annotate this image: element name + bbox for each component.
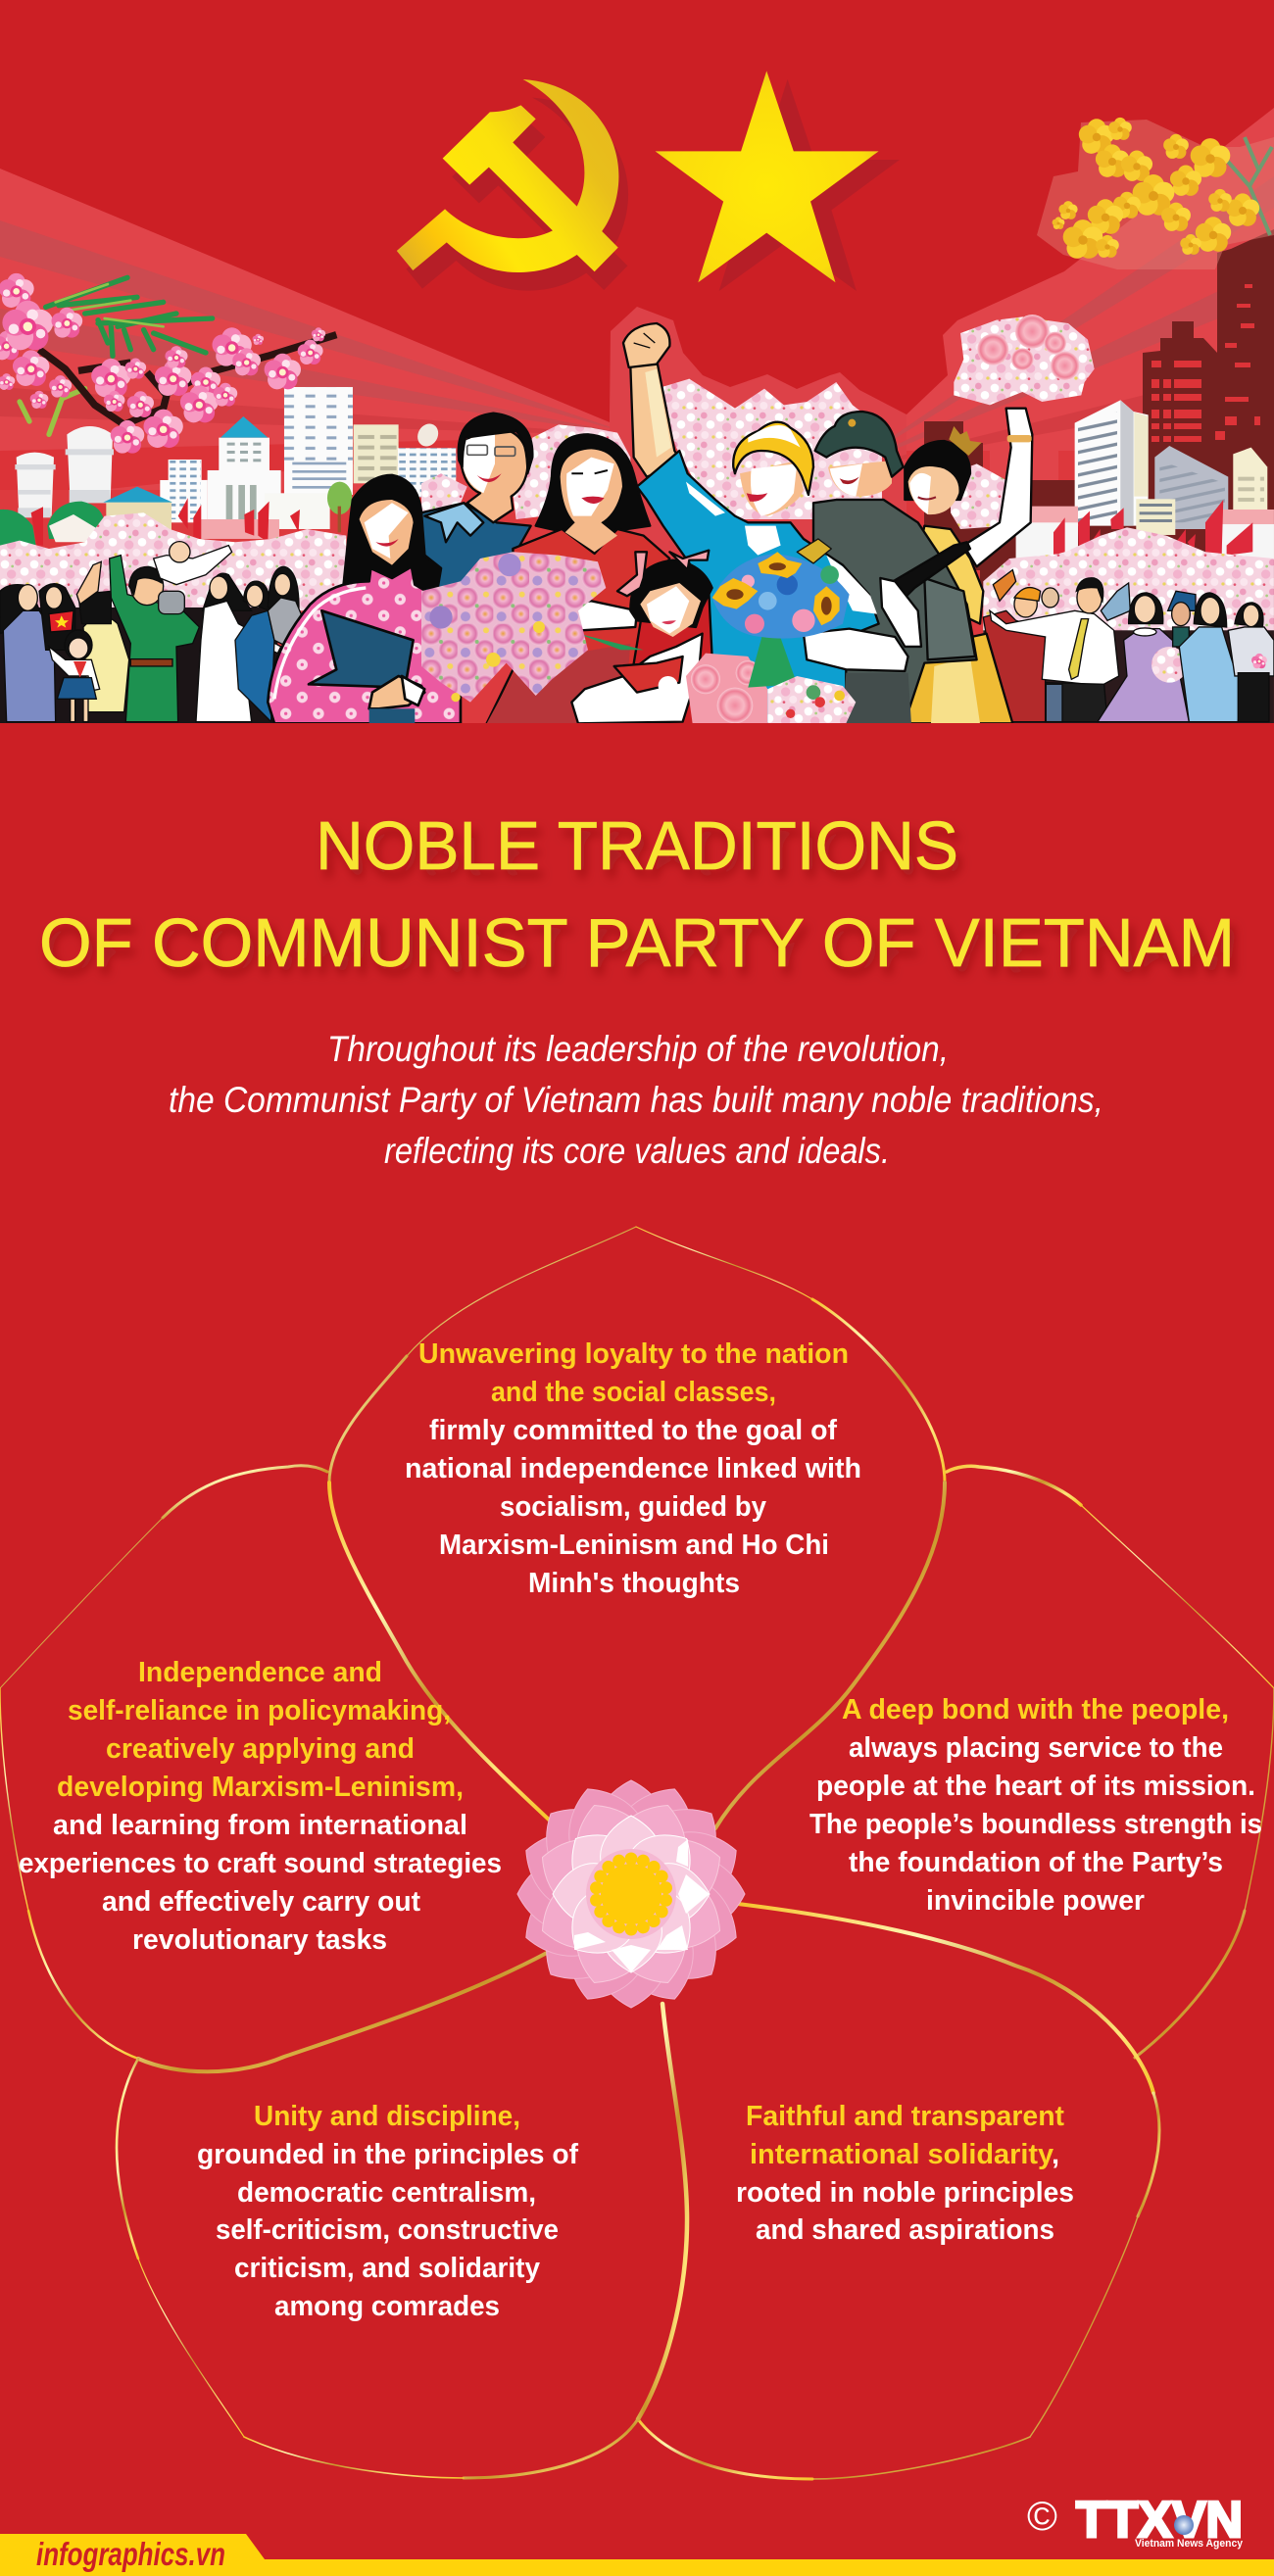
text: right petal: A deep bond with the people, <box>842 1694 1229 1725</box>
inner lotus petals <box>553 1816 710 1972</box>
face <box>908 466 958 514</box>
petal outline: left <box>0 1466 547 2071</box>
text: bottom right petal: Faithful and transparent <box>746 2101 1064 2132</box>
dark branch <box>39 335 336 424</box>
text: bottom right petal: international solidarity, <box>750 2139 1059 2170</box>
right city buildings <box>1016 400 1274 560</box>
text: top petal: Unwavering loyalty to the nation <box>418 1338 849 1370</box>
left blossom crowd band <box>0 512 346 723</box>
main figure: child with red scarf <box>562 551 712 723</box>
rose bunch <box>686 654 767 723</box>
cream dressed woman <box>83 616 129 712</box>
woman in blue <box>235 581 274 722</box>
text: left petal: revolutionary tasks <box>132 1924 387 1956</box>
white undershirt <box>745 526 781 556</box>
woman in light blue <box>1179 593 1243 722</box>
text: left petal: developing Marxism-Leninism, <box>57 1772 464 1803</box>
text: left petal: creatively applying and <box>106 1733 415 1765</box>
emblem: hammer and sickle <box>397 79 628 291</box>
text: left petal: and learning from international <box>53 1810 467 1841</box>
text: bottom right petal: and shared aspirations <box>756 2214 1054 2246</box>
text: right petal <box>809 1694 1262 1917</box>
white sleeve stripe <box>826 556 877 614</box>
yellow skirt <box>905 634 1012 723</box>
right dark skyline <box>924 229 1274 627</box>
text: top petal: national independence linked with <box>405 1453 861 1484</box>
woman in purple ao dai <box>0 585 56 722</box>
raised arm blue <box>1101 583 1130 620</box>
right background crowd <box>983 570 1274 722</box>
intro text: reflecting its core values and ideals. <box>384 1131 890 1171</box>
left background crowd <box>0 542 304 722</box>
text: top petal: socialism, guided by <box>500 1491 766 1523</box>
soldier hat <box>815 412 904 477</box>
banner bottom edge separator <box>0 723 1274 727</box>
text: top petal: Minh's thoughts <box>528 1568 740 1599</box>
text: right petal: the foundation of the Party’s <box>849 1847 1223 1878</box>
sunflower bouquet with roses <box>659 552 856 723</box>
schoolgirl <box>49 630 100 722</box>
text: top petal <box>405 1338 861 1599</box>
soldier face <box>828 461 892 497</box>
text: left petal: self-reliance in policymaking, <box>68 1695 451 1726</box>
main figure: woman in pink ao dai with folder <box>268 475 461 725</box>
white forearm across <box>804 629 908 671</box>
TTXVN logo <box>1027 2492 1244 2550</box>
blue shirt <box>637 451 879 723</box>
shoulder <box>911 526 983 624</box>
lower dark trousers <box>843 673 911 723</box>
text: left petal <box>19 1657 502 1956</box>
white petal tips <box>574 1839 710 1972</box>
hair <box>905 441 970 500</box>
text: right petal: always placing service to the <box>849 1732 1223 1764</box>
petal diagram outlines <box>0 1227 1274 2479</box>
soldier in background with hat <box>1168 591 1196 647</box>
man in white shirt <box>990 578 1119 722</box>
text: bottom left petal: democratic centralism, <box>237 2177 536 2209</box>
text: left petal: experiences to craft sound strategies <box>19 1848 502 1879</box>
shoulder stripes <box>797 539 831 563</box>
main figure: woman in red <box>487 434 669 723</box>
petal outline: bottom right <box>638 1904 1159 2479</box>
petal outline: right <box>947 1466 1274 2058</box>
fist <box>623 323 669 367</box>
raised arm <box>963 409 1032 566</box>
stems <box>748 634 797 688</box>
title: NOBLE TRADITIONS <box>316 807 958 884</box>
worker face <box>740 461 804 516</box>
right blossom crowd band <box>951 463 1274 723</box>
middle lotus petals <box>529 1792 733 1996</box>
text: top petal: and the social classes, <box>491 1377 776 1408</box>
center light ray bump <box>610 307 906 559</box>
woman in lilac <box>1098 593 1189 722</box>
text: left petal: Independence and <box>138 1657 382 1688</box>
child on shoulders <box>154 542 232 614</box>
worker in background <box>1042 588 1058 608</box>
left peach blossom branch <box>0 273 336 454</box>
text: top petal: firmly committed to the goal of <box>429 1415 837 1446</box>
left city buildings and trees <box>0 387 456 546</box>
banner illustration <box>0 71 1274 725</box>
text: bottom left petal: among comrades <box>274 2291 500 2322</box>
dark gap between people <box>78 591 111 624</box>
outer lotus petals <box>512 1774 751 2014</box>
child face <box>640 583 701 637</box>
white shirt and scarf <box>571 634 703 723</box>
raised left arms <box>76 561 101 605</box>
main figure: woman with raised bouquet and crown <box>905 315 1095 723</box>
lily bouquet <box>421 552 606 703</box>
text: bottom left petal: self-criticism, constructive <box>216 2214 559 2246</box>
logo globe <box>1174 2515 1194 2535</box>
sunflowers <box>712 552 840 625</box>
emblem: gold star <box>656 71 900 291</box>
bows <box>617 552 647 596</box>
logo wordmark: TTXVN <box>1076 2492 1243 2549</box>
footer website label: infographics.vn <box>36 2536 225 2572</box>
text: bottom left petal: Unity and discipline, <box>254 2101 520 2132</box>
title: OF COMMUNIST PARTY OF VIETNAM <box>39 904 1235 981</box>
text: right petal: people at the heart of its mission. <box>816 1771 1255 1802</box>
petal outline: bottom left <box>117 2004 687 2478</box>
raised forearm <box>630 363 683 477</box>
lotus centre disc <box>586 1849 676 1939</box>
text: right petal: invincible power <box>926 1885 1145 1917</box>
green leaves <box>20 277 213 434</box>
main figure: man with glasses <box>421 413 532 595</box>
center blossom trees <box>421 379 882 519</box>
woman in grey blouse <box>1228 603 1274 722</box>
footer yellow strip and tab <box>0 2534 1274 2576</box>
flags <box>31 498 300 546</box>
woman in white ao dai <box>196 573 281 722</box>
text: right petal: The people’s boundless strength is <box>809 1809 1262 1840</box>
copyright mark: © <box>1027 2493 1057 2539</box>
apricot blossom branch <box>1037 118 1274 269</box>
woman and flag <box>39 584 75 650</box>
petal outline: top <box>329 1227 945 1828</box>
agency name: Vietnam News Agency <box>1135 2538 1244 2550</box>
gloved hand <box>880 578 921 647</box>
white forearm <box>562 601 637 630</box>
text: bottom left petal <box>197 2101 578 2322</box>
main figure: worker with raised fist <box>623 323 911 723</box>
wildflowers <box>767 676 856 723</box>
golden stamens <box>589 1852 673 1936</box>
raised bouquet <box>954 316 1095 405</box>
intro text <box>169 1029 1103 1171</box>
text: bottom right petal <box>736 2101 1074 2246</box>
text: left petal: and effectively carry out <box>102 1886 420 1918</box>
crown <box>949 426 982 456</box>
hair <box>630 560 712 627</box>
right light ray background <box>882 108 1274 635</box>
main figure: soldier <box>813 412 977 722</box>
left light ray background <box>0 169 637 723</box>
woman in grey <box>268 566 304 647</box>
text: top petal: Marxism-Leninism and Ho Chi <box>439 1530 829 1561</box>
soldier in green <box>110 556 199 722</box>
title <box>39 807 1235 981</box>
yellow helmet <box>733 422 813 495</box>
text: bottom left petal: criticism, and solidarity <box>234 2253 540 2284</box>
intro text: the Communist Party of Vietnam has built many noble traditions, <box>169 1080 1103 1120</box>
blue flower mass <box>712 554 850 639</box>
lotus flower <box>512 1774 751 2014</box>
text: bottom left petal: grounded in the principles of <box>197 2139 578 2170</box>
man in red <box>983 570 1046 722</box>
gun <box>882 542 970 598</box>
intro text: Throughout its leadership of the revolution, <box>327 1029 949 1069</box>
pink flowers <box>0 273 325 454</box>
text: bottom right petal: rooted in noble principles <box>736 2177 1074 2209</box>
